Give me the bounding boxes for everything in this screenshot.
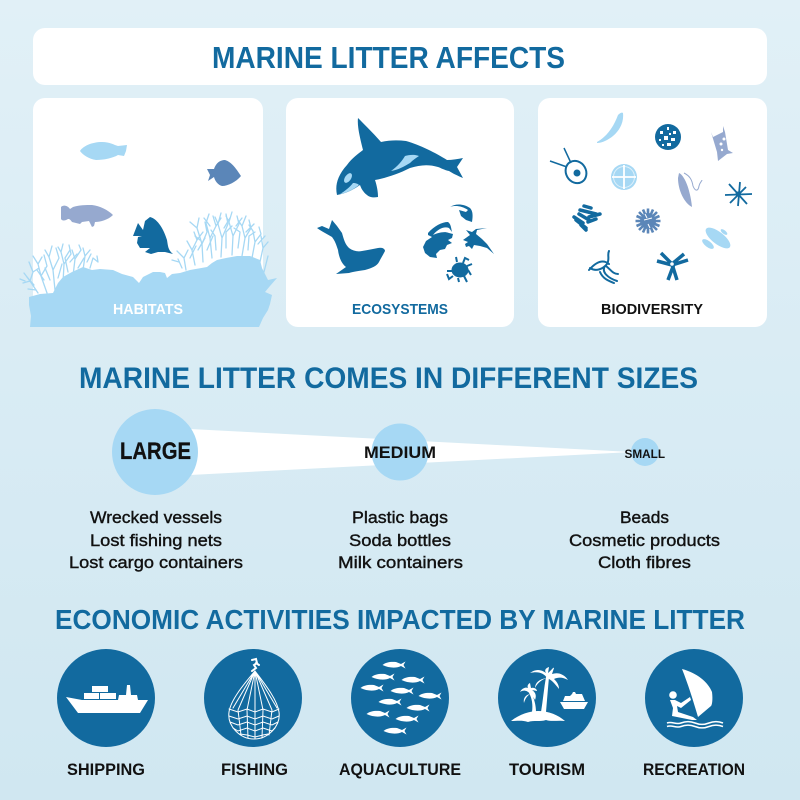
activity: recreation	[643, 649, 745, 779]
panel: biodiversity	[538, 98, 767, 327]
icon: reef silhouette	[29, 256, 277, 327]
icon: fish dark	[133, 217, 173, 254]
icon: light ellipses	[701, 224, 734, 252]
icon: coral branches	[20, 212, 268, 293]
icon: oval flagellate	[550, 148, 590, 187]
title banner	[33, 28, 767, 85]
list: small examples: Beads	[620, 508, 669, 527]
list: large examples: Lost fishing nets	[90, 531, 222, 550]
circle: small: SMALL	[624, 447, 665, 461]
heading: sizes: MARINE LITTER COMES IN DIFFERENT SIZES	[79, 362, 698, 395]
icon: fish mid blue	[207, 160, 241, 186]
list: large examples: Lost cargo containers	[69, 553, 243, 572]
list: medium examples	[338, 508, 463, 572]
activity: aquaculture: AQUACULTURE	[339, 760, 461, 779]
icon: shrimp large	[423, 222, 453, 258]
icon: rod bacteria	[574, 206, 600, 230]
icon: star dark	[725, 182, 752, 206]
icon: crab	[447, 257, 472, 282]
white wedge	[190, 429, 632, 475]
list: medium examples: Plastic bags	[352, 508, 448, 527]
icon: orca	[336, 118, 463, 197]
icon: palm island and cruise ship	[511, 667, 588, 722]
activity: tourism	[498, 649, 596, 779]
icon: cargo ship	[66, 685, 148, 713]
list: small examples: Cosmetic products	[569, 531, 720, 550]
icon: shrimp right	[463, 228, 494, 254]
icon: grey rectangular diatom	[711, 126, 733, 161]
label: ECOSYSTEMS	[352, 301, 448, 318]
icon: squiggle worms	[589, 251, 618, 283]
activity: tourism: TOURISM	[509, 760, 585, 779]
circle: medium	[364, 424, 436, 480]
activity: fishing	[204, 649, 302, 779]
icon: fish light	[80, 142, 127, 160]
activity: recreation: RECREATION	[643, 760, 745, 779]
heading: economic activities: ECONOMIC ACTIVITIES IMPACTED BY MARINE LITTER	[55, 604, 745, 635]
circle: small	[624, 438, 665, 466]
activity: shipping	[57, 649, 155, 779]
label: HABITATS	[113, 301, 183, 318]
list: medium examples: Milk containers	[338, 553, 463, 572]
activity: aquaculture	[339, 649, 461, 779]
icon: windsurfer	[667, 669, 723, 728]
label: BIODIVERSITY	[601, 301, 703, 318]
icon: four-lobed cell	[611, 164, 637, 190]
activity: fishing: FISHING	[221, 760, 288, 779]
icon: round radiolarian	[655, 124, 681, 150]
panel: habitats	[20, 98, 277, 327]
icon: spiky ball	[636, 208, 660, 234]
list: small examples	[569, 508, 720, 572]
icon: fish school	[360, 662, 442, 734]
circle: medium: MEDIUM	[364, 443, 436, 462]
list: small examples: Cloth fibres	[598, 553, 691, 572]
list: large examples	[69, 508, 243, 572]
circle: large: LARGE	[120, 438, 191, 465]
icon: grey leaf cell	[678, 173, 702, 207]
icon: seal	[317, 220, 385, 274]
title banner: MARINE LITTER AFFECTS	[212, 40, 565, 75]
icon: fish grey	[61, 205, 113, 227]
icon: fishing net	[229, 659, 279, 739]
list: medium examples: Soda bottles	[349, 531, 451, 550]
circle: large	[112, 409, 198, 495]
diagram: size scale	[112, 409, 665, 495]
activity: shipping: SHIPPING	[67, 760, 145, 779]
icon: crescent diatom	[597, 113, 623, 143]
list: large examples: Wrecked vessels	[90, 508, 222, 527]
icon: shrimp top	[450, 204, 473, 222]
icon: three-armed star	[657, 253, 688, 280]
panel: ecosystems	[286, 98, 514, 327]
